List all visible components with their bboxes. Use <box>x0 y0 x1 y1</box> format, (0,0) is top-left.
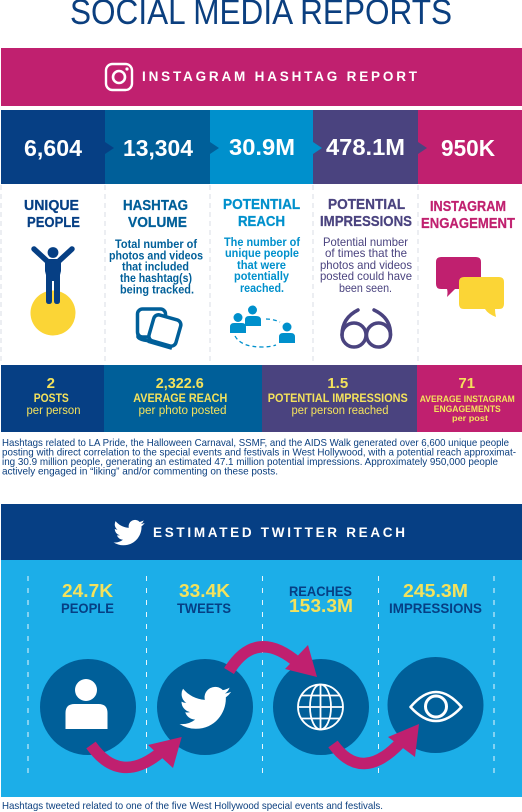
stat: potential impressions: 478.1M <box>326 134 405 160</box>
description: potential impressions: of times that the <box>325 246 407 260</box>
stat: twitter people: PEOPLE <box>61 600 114 616</box>
arrow: tweets to reaches <box>229 645 317 677</box>
icon: connected people <box>230 306 295 347</box>
icon: person on yellow circle <box>30 247 76 336</box>
panel: per-unit statistics <box>1 365 522 432</box>
description: potential reach: The number of <box>224 235 301 249</box>
stat: impressions: IMPRESSIONS <box>389 600 482 616</box>
icon: photos <box>138 309 182 348</box>
twitter footnote: Hashtags tweeted related to one of the five West Hollywood special events and festivals. <box>2 800 383 812</box>
icon: globe circle <box>273 659 369 755</box>
icon: person circle <box>40 659 136 755</box>
stat: impressions: 245.3M <box>403 580 468 601</box>
instagram summary paragraph: actively engaged in “liking” and/or commenting on these posts. <box>2 466 278 478</box>
description: potential impressions: been seen. <box>339 281 392 295</box>
description: hashtag volume: photos and videos <box>109 248 203 262</box>
stat: average engagements: per post <box>452 413 488 423</box>
panel: unique people <box>24 198 83 336</box>
heading: unique people: UNIQUE <box>24 198 79 214</box>
description: potential reach: unique people <box>225 246 299 260</box>
stat: average engagements: AVERAGE INSTAGRAM <box>420 394 515 404</box>
arrow: reaches to impressions <box>333 724 419 764</box>
stat: instagram engagement: 950K <box>441 135 495 161</box>
stat: potential impressions per person: POTENTIAL IMPRESSIONS <box>268 393 408 405</box>
icon: instagram <box>106 64 132 90</box>
panel: potential reach <box>223 197 304 347</box>
icon: speech bubbles <box>436 257 504 317</box>
arrow: people to tweets <box>91 737 182 768</box>
panel: headline statistics <box>1 110 522 184</box>
heading: instagram engagement: INSTAGRAM <box>430 199 506 215</box>
description: potential impressions: posted could have <box>320 269 412 283</box>
stat: average reach: AVERAGE REACH <box>133 393 227 405</box>
heading: potential reach: POTENTIAL <box>223 197 300 213</box>
stat: average reach: 2,322.6 <box>156 375 204 392</box>
description: potential reach: that were <box>237 258 286 272</box>
stat: unique people: 6,604 <box>24 135 82 161</box>
stat: twitter people: 24.7K <box>62 580 114 601</box>
stat: potential impressions per person: per person reached <box>292 405 388 417</box>
description: potential reach: potentially <box>234 269 289 283</box>
description: hashtag volume: being tracked. <box>120 282 194 296</box>
icon: eye circle <box>388 657 484 753</box>
stat: tweets: TWEETS <box>177 600 231 616</box>
panel: twitter banner <box>1 504 522 560</box>
instagram heading: INSTAGRAM HASHTAG REPORT <box>142 69 418 84</box>
icon: glasses <box>342 310 391 347</box>
stat: hashtag volume: 13,304 <box>123 135 193 161</box>
heading: unique people: PEOPLE <box>27 215 80 231</box>
description: hashtag volume: that included <box>122 260 189 274</box>
stat: potential reach: 30.9M <box>229 134 295 160</box>
description: potential reach: reached. <box>240 281 284 295</box>
panel: instagram banner <box>1 48 522 106</box>
stat: average engagements: 71 <box>458 375 475 392</box>
heading: hashtag volume: HASHTAG <box>123 198 188 214</box>
instagram summary paragraph: ing 30.9 million people, generating an estimated 47.1 million potential impressions. Approximately 950,000 people <box>2 456 498 468</box>
twitter heading: ESTIMATED TWITTER REACH <box>153 525 405 540</box>
stat: average reach: per photo posted <box>138 405 226 417</box>
description: hashtag volume: the hashtag(s) <box>120 271 192 285</box>
description: hashtag volume: Total number of <box>115 237 198 251</box>
description: potential impressions: Potential number <box>323 235 408 249</box>
panel: instagram engagement <box>421 199 515 317</box>
panel: twitter reach <box>1 560 522 797</box>
stat: posts per person: 2 <box>47 375 55 392</box>
icon: twitter circle <box>157 659 253 755</box>
heading: potential impressions: POTENTIAL <box>328 197 405 213</box>
heading: hashtag volume: VOLUME <box>128 215 187 231</box>
stat: tweets: 33.4K <box>179 580 231 601</box>
panel: hashtag volume <box>109 198 206 348</box>
icon: twitter bird <box>114 520 145 545</box>
stat: posts per person: per person <box>26 405 80 417</box>
heading: potential impressions: IMPRESSIONS <box>320 214 412 230</box>
stat: potential impressions per person: 1.5 <box>327 375 348 392</box>
stat: average engagements: ENGAGEMENTS <box>434 404 501 414</box>
heading: instagram engagement: ENGAGEMENT <box>421 216 515 232</box>
stat: posts per person: POSTS <box>34 393 69 405</box>
heading: potential reach: REACH <box>238 214 285 230</box>
stat: reaches: 153.3M <box>289 595 353 616</box>
description: potential impressions: photos and videos <box>320 258 412 272</box>
stat: reaches: REACHES <box>289 583 352 599</box>
panel: potential impressions <box>320 197 415 347</box>
